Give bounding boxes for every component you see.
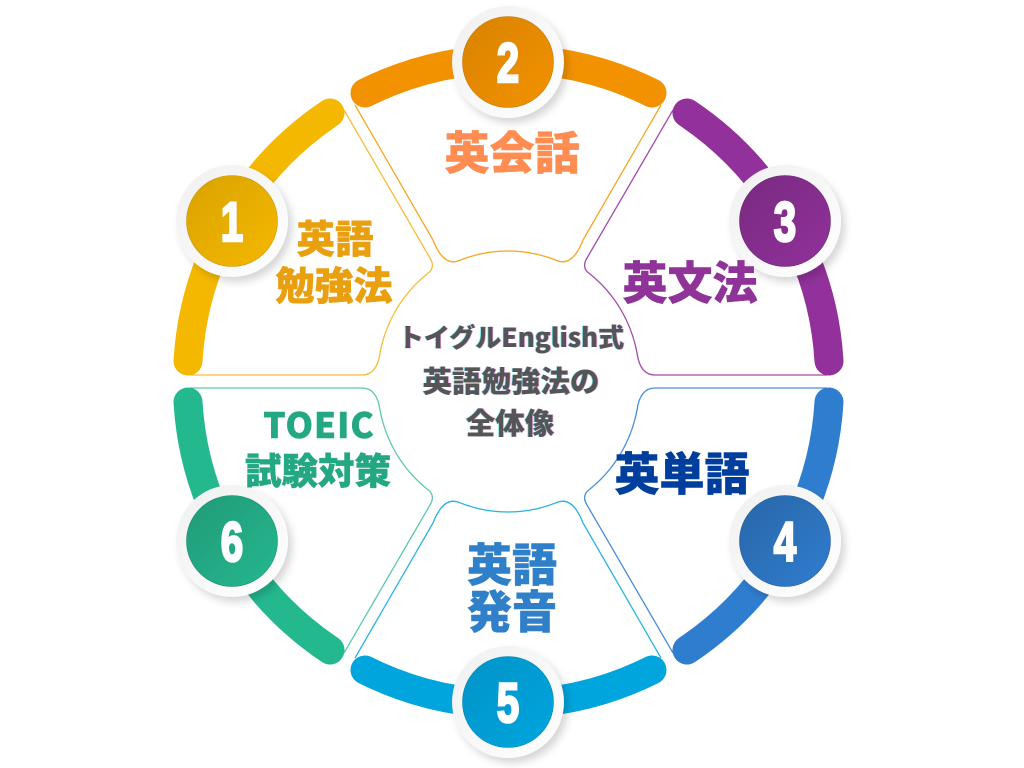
- badge 1: [176, 165, 288, 277]
- badge 5: 5: [497, 673, 519, 735]
- label 6: TOEIC: [263, 398, 375, 449]
- arc 1: [188, 113, 330, 361]
- wedge outline 5: [355, 501, 661, 658]
- segment 3: grammar: [585, 110, 841, 375]
- segment 2: conversation: [355, 6, 661, 262]
- badge 4: 4: [774, 512, 796, 574]
- arc 4: [687, 402, 829, 650]
- wedge outline 2: [355, 105, 661, 262]
- badge 4: [729, 485, 841, 597]
- arc 5: [365, 670, 652, 704]
- wedge outline 1: [190, 110, 432, 375]
- segment 1: study method: [176, 110, 432, 375]
- badge 2: [452, 6, 564, 118]
- label 1: [275, 209, 393, 312]
- wedge outline 6: [190, 388, 432, 653]
- center title: 英語勉強法の: [422, 359, 600, 401]
- label 5: 発音: [467, 576, 557, 641]
- center title: 全体像: [466, 401, 555, 443]
- center title: トイグルEnglish式: [398, 318, 624, 355]
- center title: [398, 318, 624, 443]
- arc 3: [687, 113, 829, 361]
- wedge outline 3: [585, 110, 827, 375]
- badge 3: [729, 165, 841, 277]
- badge 5: [452, 646, 564, 758]
- badge 6: 6: [221, 512, 243, 574]
- segment 6: TOEIC: [176, 388, 432, 653]
- label 6: [245, 398, 391, 495]
- label 5: [467, 529, 557, 641]
- label 5: 英語: [467, 529, 557, 594]
- badge 6: [176, 485, 288, 597]
- wedge outline 4: [585, 388, 827, 653]
- label 3: 英文法: [622, 247, 758, 312]
- badge 2: 2: [497, 33, 519, 95]
- label 2: 英会話: [444, 117, 580, 182]
- segment 5: pronunciation: [355, 501, 661, 758]
- label 1: 英語: [296, 209, 374, 265]
- arc 6: [188, 402, 330, 650]
- label 6: 試験対策: [245, 442, 391, 495]
- badge 3: 3: [774, 192, 796, 254]
- label 4: 英単語: [614, 438, 750, 503]
- segment 4: vocabulary: [585, 388, 841, 653]
- label 1: 勉強法: [275, 256, 393, 312]
- badge 1: 1: [221, 192, 243, 254]
- arc 2: [365, 59, 652, 93]
